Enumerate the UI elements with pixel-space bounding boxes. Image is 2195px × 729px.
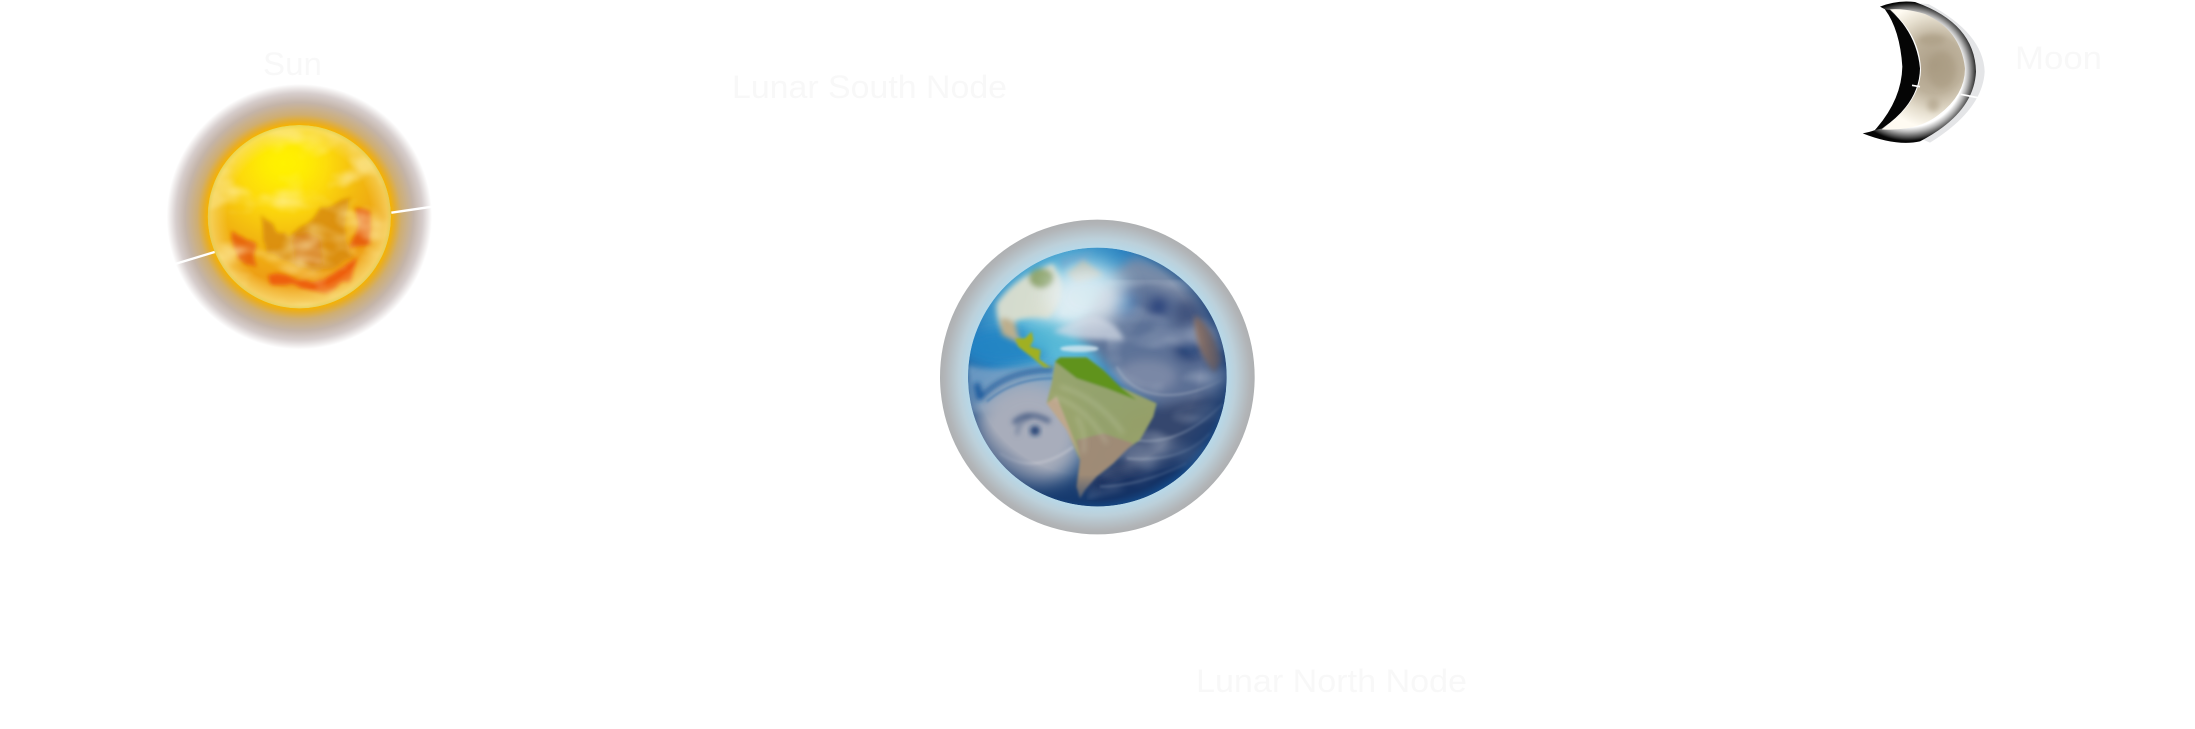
label: Moon: Moon bbox=[2015, 40, 2102, 76]
orbit line segments through the sun bbox=[175, 207, 432, 264]
globe bbox=[963, 248, 1230, 507]
right storm clouds bbox=[1077, 257, 1230, 507]
label: Lunar South Node: Lunar South Node bbox=[732, 69, 1007, 105]
central america bbox=[1015, 332, 1053, 367]
icon: crescent moon bbox=[1863, 2, 1985, 143]
graded outer band bbox=[1863, 2, 1976, 143]
diagram: sun, earth, moon and lunar nodes bbox=[168, 2, 1984, 534]
hurricane bbox=[972, 378, 1085, 488]
icon: earth bbox=[940, 220, 1255, 534]
icon: sun bbox=[167, 84, 432, 349]
white northern cloud glow bbox=[1047, 265, 1127, 328]
dark terminator bbox=[1875, 9, 1920, 130]
africa bbox=[1195, 315, 1222, 373]
label: Lunar North Node: Lunar North Node bbox=[1196, 663, 1467, 699]
equatorial band bbox=[967, 365, 1060, 413]
north america bbox=[996, 252, 1103, 343]
swirl cloud texture bbox=[1087, 280, 1230, 500]
lunar surface bbox=[1882, 9, 1965, 130]
label: Sun: Sun bbox=[263, 46, 322, 82]
pale outer shadow bbox=[1920, 3, 1985, 143]
sun disc bbox=[208, 125, 391, 308]
south america bbox=[1047, 357, 1157, 498]
orbit line marks on the moon bbox=[1912, 85, 1979, 98]
